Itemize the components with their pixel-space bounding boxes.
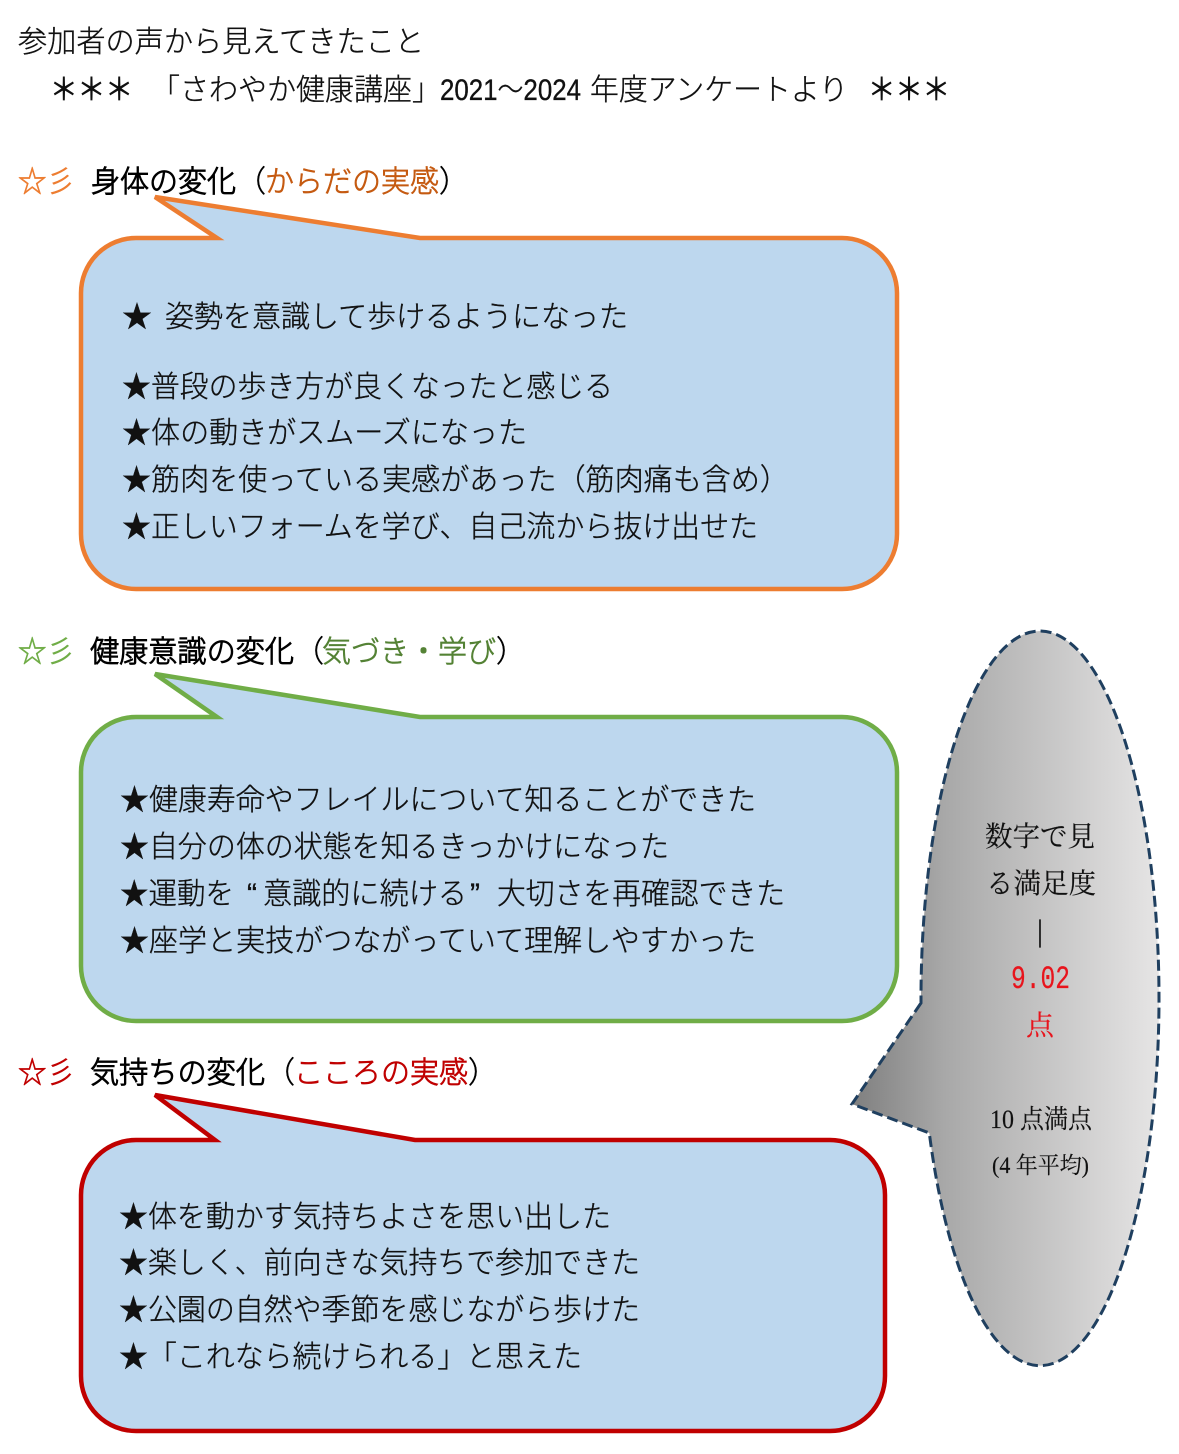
heading: health awareness change: 健康意識の変化 [90, 636, 294, 669]
panel: body change callout: ★普段の歩き方が良くなったと感じる [122, 371, 613, 404]
panel: body change callout: ★筋肉を使っている実感があった（筋肉痛も含め） [122, 464, 789, 497]
heading: health awareness change: ☆彡 [18, 636, 75, 669]
panel: body change callout: 姿勢を意識して歩けるようになった [165, 301, 628, 334]
heading: feelings change: （ [265, 1057, 295, 1090]
heading: health awareness change [18, 636, 526, 669]
panel: satisfaction oval callout: 10 点満点 [990, 1105, 1093, 1134]
panel: health awareness callout: ★健康寿命やフレイルについて知ることができた [120, 784, 756, 817]
panel: satisfaction oval callout: る満足度 [986, 868, 1096, 900]
heading: health awareness change: （ [294, 636, 324, 669]
subtitle: ＊＊＊ [868, 74, 950, 107]
subtitle: ＊＊＊ [50, 74, 133, 107]
panel: satisfaction oval callout [852, 631, 1159, 1366]
panel: health awareness callout: ★座学と実技がつながっていて理解しやすかった [120, 925, 756, 958]
heading: feelings change: 気持ちの変化 [90, 1057, 265, 1090]
panel: health awareness callout: 大切さを再確認できた [497, 878, 785, 911]
panel: feelings callout: ★楽しく、前向きな気持ちで参加できた [119, 1247, 640, 1280]
panel: feelings callout [81, 1095, 885, 1431]
heading: body change: （ [236, 166, 266, 199]
panel: health awareness callout: “ [247, 878, 257, 911]
heading: body change: ） [439, 166, 469, 199]
panel: satisfaction oval callout: 9.02 [1011, 961, 1070, 998]
heading: feelings change: ） [468, 1057, 498, 1090]
panel: feelings callout: ★公園の自然や季節を感じながら歩けた [119, 1294, 640, 1327]
title: 参加者の声から見えてきたこと [18, 26, 424, 59]
panel: feelings callout: ★体を動かす気持ちよさを思い出した [119, 1201, 611, 1234]
heading: feelings change: ☆彡 [18, 1057, 75, 1090]
panel: health awareness callout: 意識的に続ける [263, 878, 467, 911]
panel: satisfaction oval callout: (4 年平均) [992, 1153, 1089, 1178]
panel: health awareness callout: ★運動を [120, 878, 234, 911]
heading: health awareness change: ） [496, 636, 526, 669]
panel: body change callout: ★体の動きがスムーズになった [122, 417, 527, 450]
panel: satisfaction oval callout: | [1037, 913, 1043, 948]
heading: body change: からだの実感 [265, 166, 439, 199]
panel: body change callout: ★ [122, 301, 152, 334]
heading: body change: 身体の変化 [91, 166, 236, 199]
subtitle: 「さわやか健康講座」 [151, 74, 441, 107]
panel: health awareness callout: ” [470, 878, 480, 911]
panel: body change callout: ★正しいフォームを学び、自己流から抜け出せた [122, 511, 758, 544]
heading: health awareness change: 気づき・学び [322, 636, 496, 669]
heading: body change: ☆彡 [18, 166, 75, 199]
subtitle: 年度アンケートより [590, 74, 848, 107]
heading: feelings change [18, 1057, 498, 1090]
panel: body change callout [81, 197, 897, 589]
heading: body change [18, 166, 469, 199]
panel: satisfaction oval callout: 点 [1026, 1010, 1055, 1042]
panel: health awareness callout [81, 674, 897, 1021]
panel: health awareness callout: ★自分の体の状態を知るきっかけになった [120, 831, 669, 864]
subtitle [50, 74, 950, 107]
subtitle: 2021～2024 [440, 74, 581, 107]
panel: satisfaction oval callout: 数字で見 [985, 821, 1095, 853]
heading: feelings change: こころの実感 [294, 1057, 468, 1090]
panel: feelings callout: ★「これなら続けられる」と思えた [119, 1341, 582, 1374]
